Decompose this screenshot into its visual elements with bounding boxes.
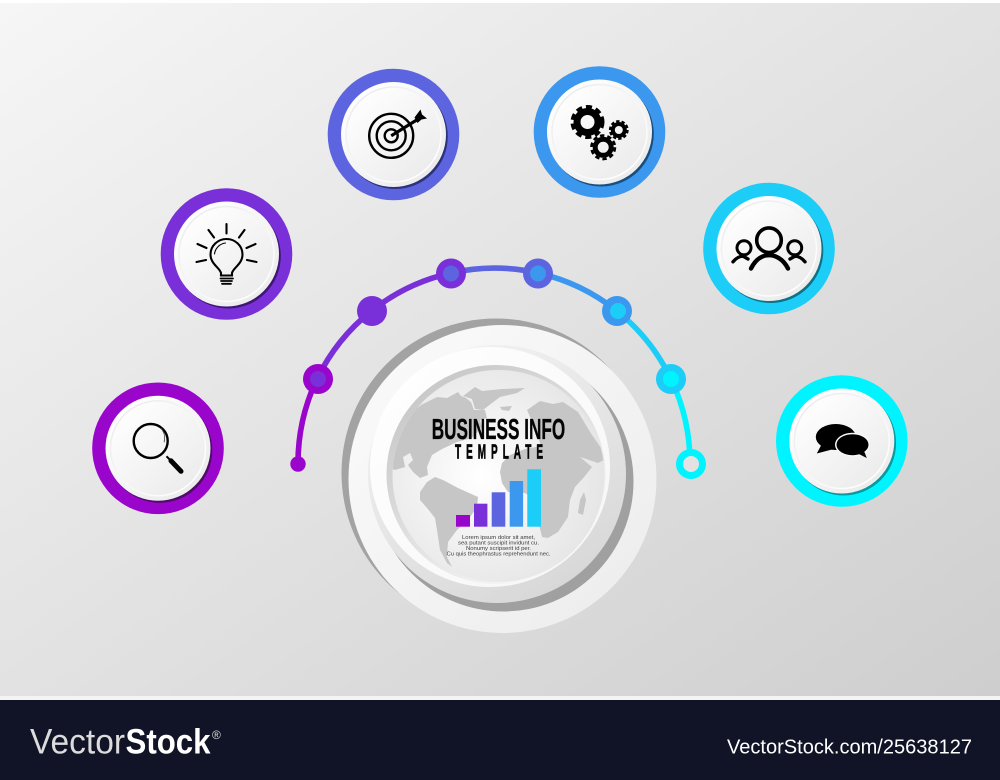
title: TEMPLATE [455,442,543,464]
icon: target with dart [369,110,427,158]
icon: light bulb [196,224,256,284]
icon: gears [572,107,628,159]
node: settings [534,66,665,198]
footer logo: Stock [126,722,211,762]
node: search [92,382,224,514]
body text: Lorem ipsum dolor sit amet, [462,535,535,541]
footer image id: VectorStock.com/25638127 [727,736,972,758]
footer logo: ® [212,728,221,742]
world map [387,387,608,567]
icon: magnifying glass [134,424,181,471]
icon: group of people [733,228,805,268]
central emblem [342,318,656,633]
body text [446,535,551,557]
bar chart [456,469,541,527]
arc nodes [290,258,706,479]
footer logo [30,722,221,762]
body text: Nonumy scripserit id per. [466,546,531,552]
node: chat [776,375,908,507]
footer bar [0,696,1000,780]
timeline arc [290,258,706,479]
node: team [703,183,835,314]
title: BUSINESS INFO [432,414,565,446]
body text: Cu quis theophrastus reprehendunt nec. [446,551,551,557]
node: idea [161,188,292,320]
title [432,414,565,464]
node: target [328,69,459,200]
footer logo: Vector [30,722,125,762]
body text: sea putant suscipit invidunt cu. [458,540,539,546]
icon: speech bubbles [816,424,870,458]
